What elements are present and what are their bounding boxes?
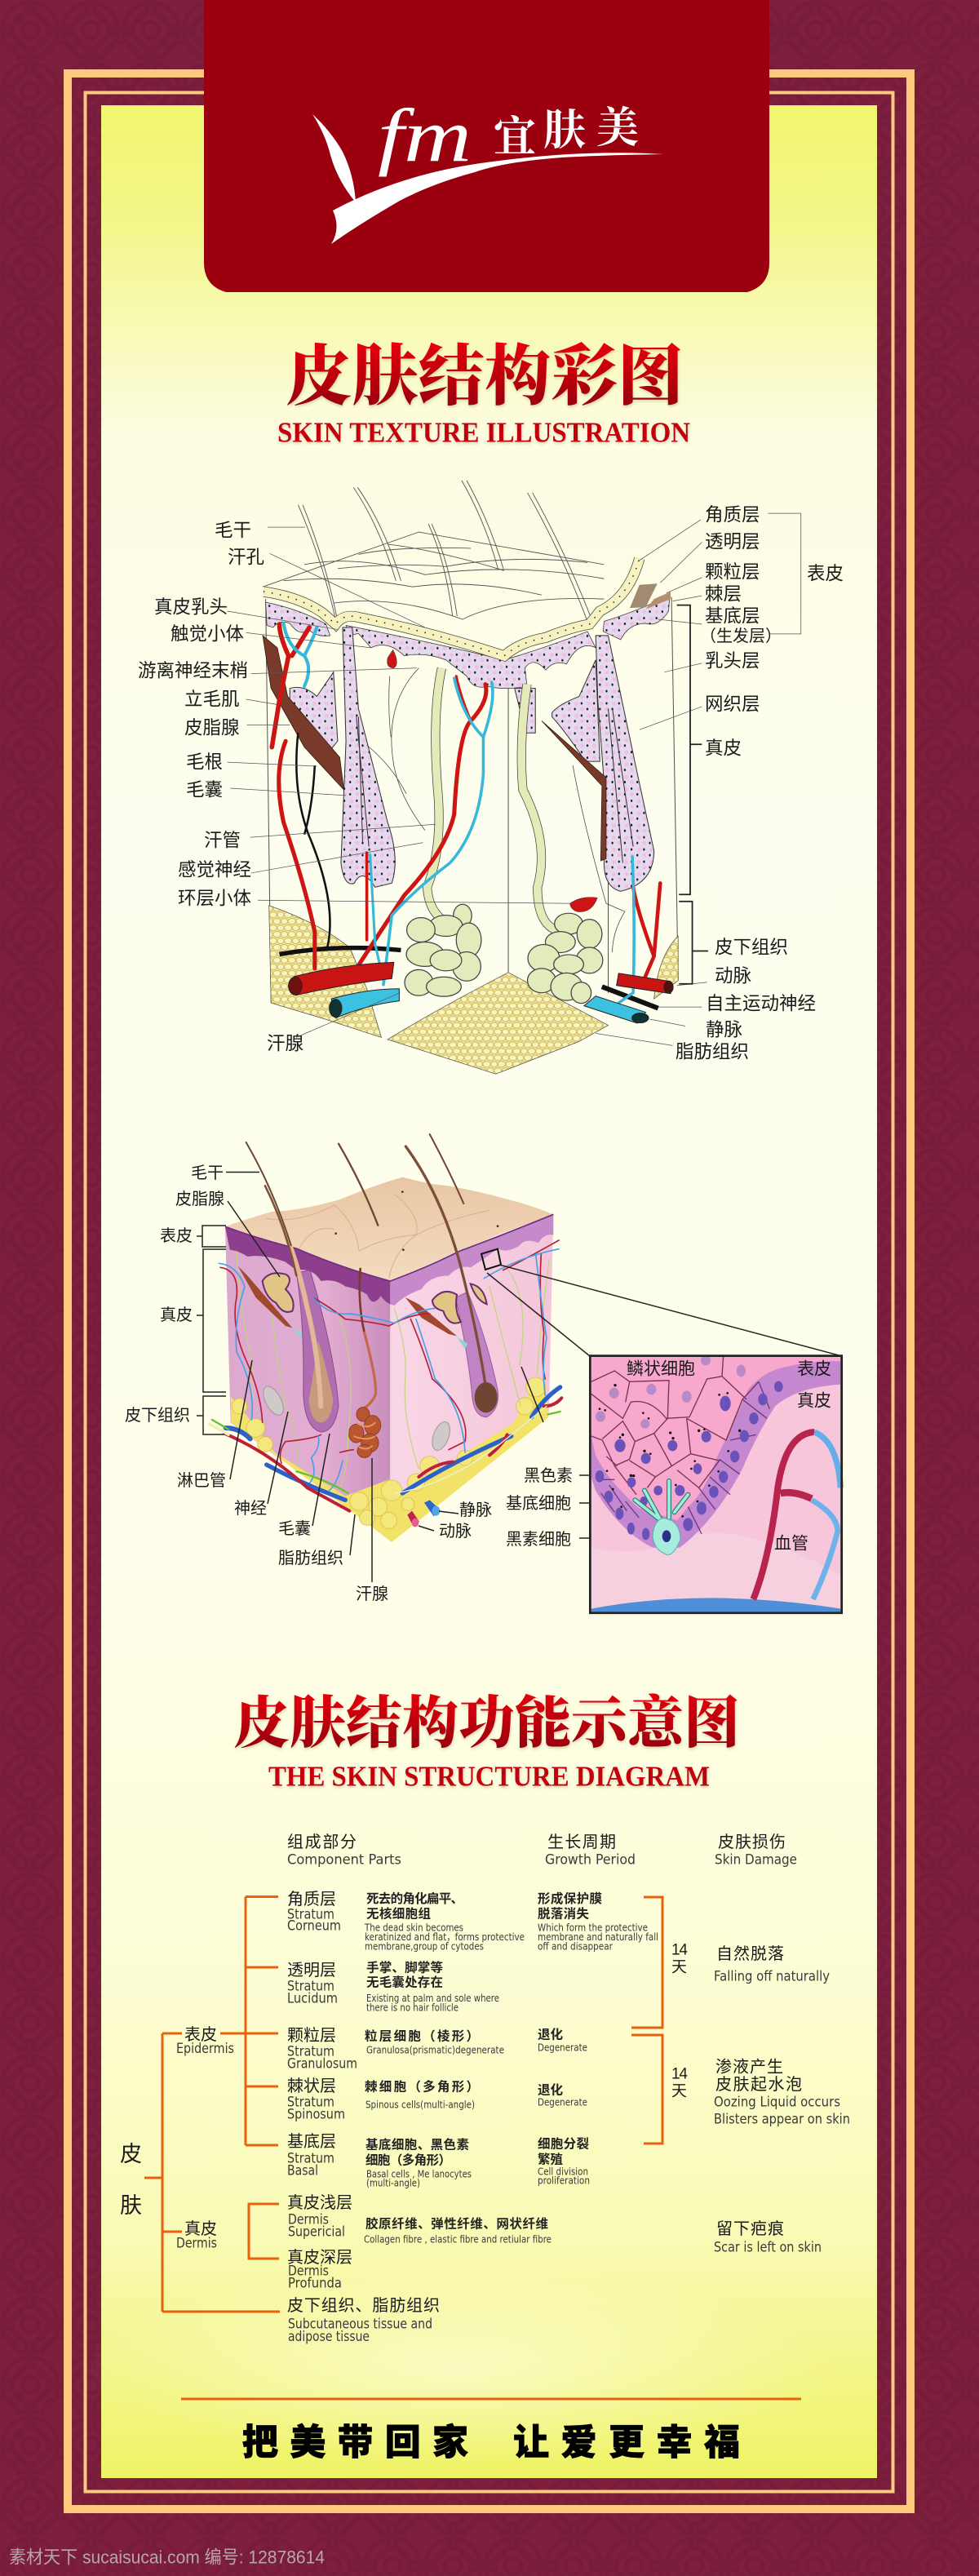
layer names: 透明层 xyxy=(287,1961,336,1980)
labels left xyxy=(138,521,303,1054)
layer descriptions: 基底细胞、黑色素 xyxy=(365,2136,469,2153)
capillaries xyxy=(753,1432,840,1599)
skin damage column: 留下疤痕 xyxy=(716,2219,784,2238)
labels right: 网织层 xyxy=(705,694,760,715)
layer descriptions: Granulosa(prismatic)degenerate xyxy=(366,2043,504,2056)
melanocyte xyxy=(635,1481,688,1555)
layer names: Stratum xyxy=(287,2151,334,2166)
labels left: 汗孔 xyxy=(228,547,264,568)
melanin granules xyxy=(599,1384,741,1518)
labels right: 真皮 xyxy=(705,738,742,759)
inset labels: 真皮 xyxy=(797,1392,831,1410)
column headers: Growth Period xyxy=(545,1852,636,1867)
sebaceous glands xyxy=(263,1273,487,1323)
growth period column: 细胞分裂 xyxy=(538,2136,589,2151)
inset: enlarged epidermis xyxy=(590,1355,842,1613)
layer names: Lucidum xyxy=(287,1991,338,2006)
column headers: Skin Damage xyxy=(715,1852,797,1867)
title: skin texture illustration: SKIN TEXTURE ILLUSTRATION xyxy=(277,416,690,449)
layer descriptions: The dead skin becomes xyxy=(364,1921,463,1934)
labels right: 表皮 xyxy=(807,563,844,584)
cut vessels xyxy=(407,1500,440,1527)
skin damage column xyxy=(714,1944,850,2255)
growth period column: 退化 xyxy=(538,2027,563,2042)
column headers: 皮肤损伤 xyxy=(718,1833,786,1851)
labels right: 皮下组织 xyxy=(715,937,788,958)
layer descriptions: Basal cells , Me lanocytes xyxy=(366,2167,472,2180)
labels left: 环层小体 xyxy=(178,888,251,909)
cube faces xyxy=(225,1177,553,1501)
fat layer xyxy=(231,1377,549,1542)
labels right: 基底层 xyxy=(705,605,760,627)
table: skin structure function xyxy=(120,1833,850,2344)
basal purple band xyxy=(591,1361,840,1548)
inset labels: 鳞状细胞 xyxy=(627,1359,695,1379)
layer descriptions: (multi-angle) xyxy=(366,2177,420,2188)
growth period column: 天 xyxy=(671,2082,687,2100)
layer names: Stratum xyxy=(287,1906,334,1922)
inset background xyxy=(590,1356,842,1613)
epidermis and lavender basal layer xyxy=(264,558,671,689)
root label: 肤 xyxy=(120,2193,142,2218)
dermis streaks xyxy=(591,1533,840,1612)
labels: 汗腺 xyxy=(356,1585,388,1603)
column headers: Component Parts xyxy=(287,1852,401,1867)
labels: 基底细胞 xyxy=(506,1494,571,1513)
slogan: 把美带回家 xyxy=(242,2413,468,2465)
labels: 静脉 xyxy=(459,1501,492,1519)
hair bulb xyxy=(475,1382,498,1412)
labels: 脂肪组织 xyxy=(278,1549,343,1567)
corpuscles xyxy=(388,650,597,911)
layer names: 角质层 xyxy=(287,1890,336,1909)
labels: 淋巴管 xyxy=(177,1471,226,1490)
inset labels: 血管 xyxy=(774,1534,808,1554)
layer descriptions: 细胞（多角形） xyxy=(365,2153,451,2167)
labels right: 颗粒层 xyxy=(705,561,760,583)
fat tissue xyxy=(269,906,678,1074)
branch labels: 真皮 xyxy=(184,2219,217,2238)
labels right: 静脉 xyxy=(706,1020,742,1040)
growth period column: Cell division xyxy=(538,2166,588,2177)
skin damage column: 皮肤起水泡 xyxy=(715,2075,802,2094)
nerves xyxy=(279,668,658,1009)
pacinian corpuscles xyxy=(259,1383,454,1452)
epidermis xyxy=(225,1214,553,1306)
skin damage column: Scar is left on skin xyxy=(714,2239,822,2255)
logo: 宜肤美 xyxy=(494,93,639,163)
layer descriptions: 死去的角化扁平、 xyxy=(366,1891,463,1906)
growth period column: Degenerate xyxy=(538,2095,587,2108)
layer names: 皮下组织、脂肪组织 xyxy=(287,2296,440,2315)
labels right: 脂肪组织 xyxy=(676,1041,749,1062)
vessel tubes xyxy=(289,962,673,1023)
brackets xyxy=(677,605,708,984)
logo: fm xyxy=(378,94,472,177)
pale nuclei xyxy=(596,1355,817,1429)
labels right: 角质层 xyxy=(705,504,760,525)
title: skin texture illustration: 皮肤结构彩图 xyxy=(286,340,684,414)
skin damage column: Blisters appear on skin xyxy=(714,2112,850,2126)
growth period column: proliferation xyxy=(538,2174,590,2187)
labels left: 汗管 xyxy=(204,831,241,850)
labels: 毛干 xyxy=(191,1164,224,1182)
title: skin texture illustration xyxy=(277,340,690,449)
pores xyxy=(334,1190,498,1251)
skin damage column: Falling off naturally xyxy=(714,1968,830,1984)
inset frame xyxy=(590,1356,842,1613)
labels: 神经 xyxy=(234,1499,267,1518)
layer names: Granulosum xyxy=(287,2056,357,2071)
growth period column: Degenerate xyxy=(538,2042,587,2053)
hairs and surface lines xyxy=(263,481,604,621)
branch labels: Dermis xyxy=(176,2236,217,2250)
layer descriptions xyxy=(364,1891,552,2246)
column headers: 生长周期 xyxy=(547,1833,616,1851)
column headers xyxy=(287,1833,797,1867)
sweat ducts xyxy=(427,668,566,932)
labels left: 感觉神经 xyxy=(178,860,251,880)
hair follicles and sebaceous glands xyxy=(290,627,654,891)
leader lines and brackets xyxy=(197,1172,842,1582)
watermark: 素材天下 sucaisucai.com 编号: 12878614 xyxy=(9,2547,325,2567)
layer descriptions: 棘细胞（多角形） xyxy=(365,2079,479,2094)
root label: 皮 xyxy=(120,2142,142,2166)
labels: 表皮 xyxy=(160,1226,193,1245)
labels left: 触觉小体 xyxy=(171,623,244,645)
layer names: 颗粒层 xyxy=(287,2026,336,2045)
labels left: 毛干 xyxy=(215,521,251,540)
follicles xyxy=(296,1270,498,1432)
growth period column: 脱落消失 xyxy=(538,1906,589,1921)
labels: 黑素细胞 xyxy=(506,1530,571,1549)
enlargement box xyxy=(481,1249,501,1270)
growth period column: membrane and naturally fall xyxy=(538,1931,658,1943)
layer names: Stratum xyxy=(287,1978,334,1994)
labels: 黑色素 xyxy=(524,1466,573,1485)
labels left: 汗腺 xyxy=(267,1033,303,1054)
labels: 皮下组织 xyxy=(125,1406,190,1425)
sweat glands xyxy=(405,904,603,1004)
layer names: Stratum xyxy=(287,2043,334,2059)
slogan xyxy=(242,2413,740,2465)
layer names: 真皮深层 xyxy=(287,2248,352,2267)
layer names: Dermis xyxy=(288,2263,329,2278)
skin damage column: Oozing Liquid occurs xyxy=(714,2094,840,2110)
layer names: adipose tissue xyxy=(288,2329,370,2344)
blood layer xyxy=(591,1598,840,1612)
layer names: 真皮浅层 xyxy=(287,2193,352,2212)
inset labels: 表皮 xyxy=(797,1359,831,1379)
growth period column: 天 xyxy=(671,1958,687,1976)
labels xyxy=(125,1164,573,1603)
footer rule xyxy=(181,2397,801,2401)
labels right: 乳头层 xyxy=(705,651,760,671)
labels left: 真皮乳头 xyxy=(154,597,228,617)
layer descriptions: there is no hair follicle xyxy=(366,2001,458,2014)
layer names: Profunda xyxy=(288,2275,342,2291)
growth period column xyxy=(538,1891,688,2187)
branch labels xyxy=(176,2025,234,2250)
panel: cream yellow content area xyxy=(82,105,877,2478)
layer descriptions: 无核细胞组 xyxy=(366,1906,431,1921)
layer descriptions: 粒层细胞（棱形） xyxy=(365,2028,479,2043)
header tab with logo xyxy=(204,0,769,292)
title: skin structure diagram: 皮肤结构功能示意图 xyxy=(233,1691,740,1754)
growth period column: 繁殖 xyxy=(538,2151,563,2167)
diagram 1: line illustration of skin cross-section xyxy=(138,481,844,1074)
logo xyxy=(312,93,663,244)
skin damage column: 渗液产生 xyxy=(715,2058,783,2076)
tree connectors xyxy=(144,1896,662,2312)
cell walls xyxy=(591,1356,769,1534)
growth period column: 14 xyxy=(671,2066,688,2082)
skin block drawing xyxy=(228,481,801,1074)
hairs xyxy=(246,1134,485,1406)
skin damage column: 自然脱落 xyxy=(716,1944,784,1963)
cube drawing xyxy=(210,1134,561,1542)
diagram 2: colour skin cube xyxy=(125,1134,842,1613)
growth period column: Which form the protective xyxy=(538,1921,648,1934)
labels: 真皮 xyxy=(160,1306,193,1324)
layer names: Basal xyxy=(287,2162,318,2179)
layer names: Subcutaneous tissue and xyxy=(288,2316,432,2332)
layer names xyxy=(287,1890,440,2344)
layer names: Corneum xyxy=(287,1918,341,1934)
blood vessels xyxy=(272,623,660,1003)
leader lines xyxy=(228,513,801,1045)
cube edges xyxy=(266,597,678,1003)
branch labels: Epidermis xyxy=(176,2041,234,2056)
labels left: 毛囊 xyxy=(186,780,223,800)
layer descriptions: Existing at palm and sole where xyxy=(366,1992,499,2004)
growth period column: 形成保护膜 xyxy=(538,1891,602,1906)
layer names: 棘状层 xyxy=(287,2077,336,2095)
nerves, arteries and veins xyxy=(210,1240,561,1511)
inset labels xyxy=(627,1359,831,1554)
layer descriptions: Spinous cells(multi-angle) xyxy=(365,2099,475,2110)
labels right: 透明层 xyxy=(705,532,760,552)
labels right: 自主运动神经 xyxy=(706,994,816,1013)
layer names: Stratum xyxy=(287,2094,334,2110)
labels right: 棘层 xyxy=(705,584,742,604)
arrector muscles xyxy=(238,1266,457,1336)
title: skin structure diagram xyxy=(233,1691,740,1792)
growth period column: 退化 xyxy=(538,2082,563,2097)
labels left: 立毛肌 xyxy=(184,689,240,710)
arrector pili muscles xyxy=(263,636,606,861)
cell mass xyxy=(591,1356,840,1548)
growth period column: off and disappear xyxy=(538,1940,614,1952)
layer descriptions: Collagen fibre , elastic fibre and retiular fibre xyxy=(364,2232,552,2246)
labels left: 皮脂腺 xyxy=(184,718,240,738)
muscle attachments xyxy=(292,1328,467,1349)
layer names: Dermis xyxy=(288,2211,329,2228)
layer descriptions: membrane,group of cytodes xyxy=(365,1940,484,1952)
title: skin structure diagram: THE SKIN STRUCTURE DIAGRAM xyxy=(268,1761,710,1792)
layer names: Spinosum xyxy=(287,2107,345,2122)
layer names: Supericial xyxy=(288,2224,345,2239)
layer descriptions: 手掌、脚掌等 xyxy=(366,1960,443,1975)
growth period column: 14 xyxy=(671,1942,688,1958)
root label xyxy=(120,2142,142,2218)
labels right: 动脉 xyxy=(715,966,751,986)
layer descriptions: 胶原纤维、弹性纤维、网状纤维 xyxy=(365,2216,548,2231)
layer descriptions: keratinized and flat，forms protective xyxy=(365,1931,525,1943)
layer descriptions: 无毛囊处存在 xyxy=(366,1975,443,1989)
labels left: 毛根 xyxy=(186,752,223,772)
sweat gland and duct xyxy=(360,1269,376,1409)
labels right: （生发层） xyxy=(700,627,782,645)
labels right xyxy=(676,504,844,1062)
layer names: 基底层 xyxy=(287,2132,336,2151)
slogan: 让爱更幸福 xyxy=(513,2413,740,2465)
sweat gland coil xyxy=(348,1408,381,1457)
column headers: 组成部分 xyxy=(287,1833,357,1851)
labels: 皮脂腺 xyxy=(175,1190,224,1208)
red tab xyxy=(204,0,769,292)
labels: 毛囊 xyxy=(278,1519,311,1538)
branch labels: 表皮 xyxy=(184,2025,217,2044)
nuclei xyxy=(596,1381,783,1540)
labels: 动脉 xyxy=(439,1522,472,1541)
frame: inner gold line xyxy=(85,93,893,2492)
labels left: 游离神经末梢 xyxy=(138,661,248,681)
